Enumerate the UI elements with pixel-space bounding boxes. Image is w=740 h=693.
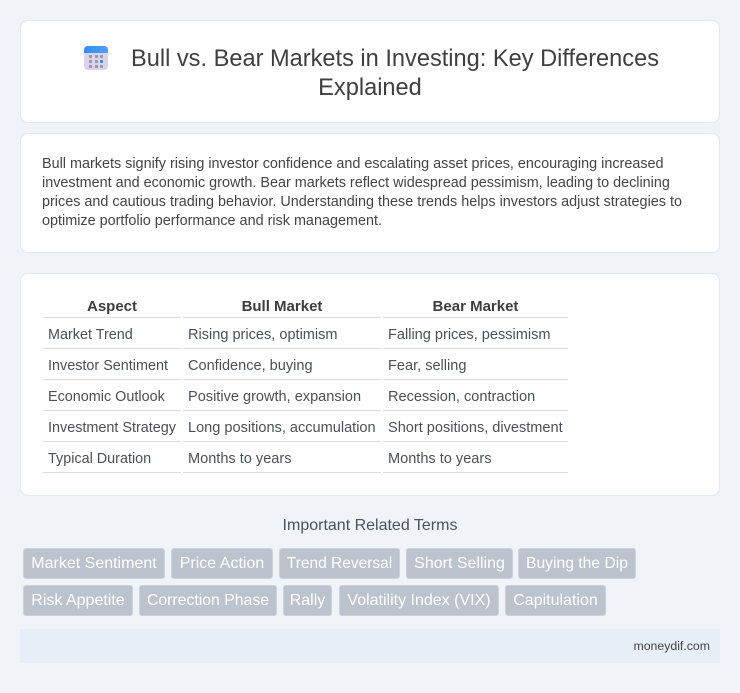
related terms tags: [23, 548, 636, 616]
table header row: Aspect: [87, 298, 137, 315]
table row: investment strategy: Long positions, accumulation: [188, 420, 376, 436]
tag: Trend Reversal: [287, 555, 392, 572]
table row: typical duration: Typical Duration: [48, 451, 151, 467]
tag: [518, 548, 636, 579]
tag: [139, 585, 277, 616]
tag: Short Selling: [414, 555, 505, 572]
title: Bull vs. Bear Markets in Investing: Key Differences: [131, 46, 659, 72]
text block: introduction: [42, 156, 682, 229]
comparison table: [43, 298, 568, 473]
table row: economic outlook: [48, 389, 535, 405]
table row: market trend: Falling prices, pessimism: [388, 327, 550, 343]
table row: economic outlook: Recession, contraction: [388, 389, 535, 405]
table header row: [87, 298, 518, 315]
table row: market trend: [48, 327, 550, 343]
table header row: Bull Market: [242, 298, 322, 315]
table row: investment strategy: Short positions, divestment: [388, 420, 563, 436]
table row: investor sentiment: [48, 358, 466, 374]
tag: [406, 548, 513, 579]
title: [131, 46, 659, 101]
heading: important related terms: Important Related Terms: [283, 517, 457, 534]
text block: introduction: investment and economic growth. Bear markets reflect widespread pessimism, leading to declining: [42, 175, 670, 191]
tag: [339, 585, 499, 616]
tag: Price Action: [180, 555, 264, 572]
text block: introduction: optimize portfolio performance and risk management.: [42, 213, 382, 229]
table row: typical duration: [48, 451, 492, 467]
title: Explained: [318, 75, 422, 101]
table row: investment strategy: Investment Strategy: [48, 420, 176, 436]
tag: Correction Phase: [147, 592, 269, 609]
table row: economic outlook: Economic Outlook: [48, 389, 165, 405]
tag: Volatility Index (VIX): [347, 592, 491, 609]
footer source text: moneydif.com: [633, 639, 710, 653]
table row: economic outlook: Positive growth, expansion: [188, 389, 361, 405]
tag: Risk Appetite: [31, 592, 125, 609]
table row: investor sentiment: Investor Sentiment: [48, 358, 168, 374]
tag: Rally: [290, 592, 325, 609]
text block: introduction: prices and cautious trading behavior. Understanding these trends helps investors adjust strategies to: [42, 194, 682, 210]
tag: Market Sentiment: [31, 555, 157, 572]
footer bar: [20, 629, 720, 663]
table row: typical duration: Months to years: [388, 451, 492, 467]
table row: typical duration: Months to years: [188, 451, 292, 467]
table row: market trend: Rising prices, optimism: [188, 327, 338, 343]
tag: [283, 585, 332, 616]
tag: [505, 585, 606, 616]
table header row: Bear Market: [433, 298, 518, 315]
table row: investor sentiment: Confidence, buying: [188, 358, 313, 374]
icon: calendar: [84, 46, 108, 70]
tag: Buying the Dip: [526, 555, 628, 572]
tag: [171, 548, 273, 579]
table row: investor sentiment: Fear, selling: [388, 358, 466, 374]
tag: [23, 548, 165, 579]
tag: [23, 585, 133, 616]
panel: intro text card: [20, 133, 720, 253]
tag: [279, 548, 400, 579]
tag: Capitulation: [513, 592, 598, 609]
table row: market trend: Market Trend: [48, 327, 133, 343]
panel: title card: [20, 20, 720, 123]
text block: introduction: Bull markets signify rising investor confidence and escalating asset prices, encouraging increased: [42, 156, 664, 172]
table row: investment strategy: [48, 420, 563, 436]
panel: comparison table card: [20, 273, 720, 496]
